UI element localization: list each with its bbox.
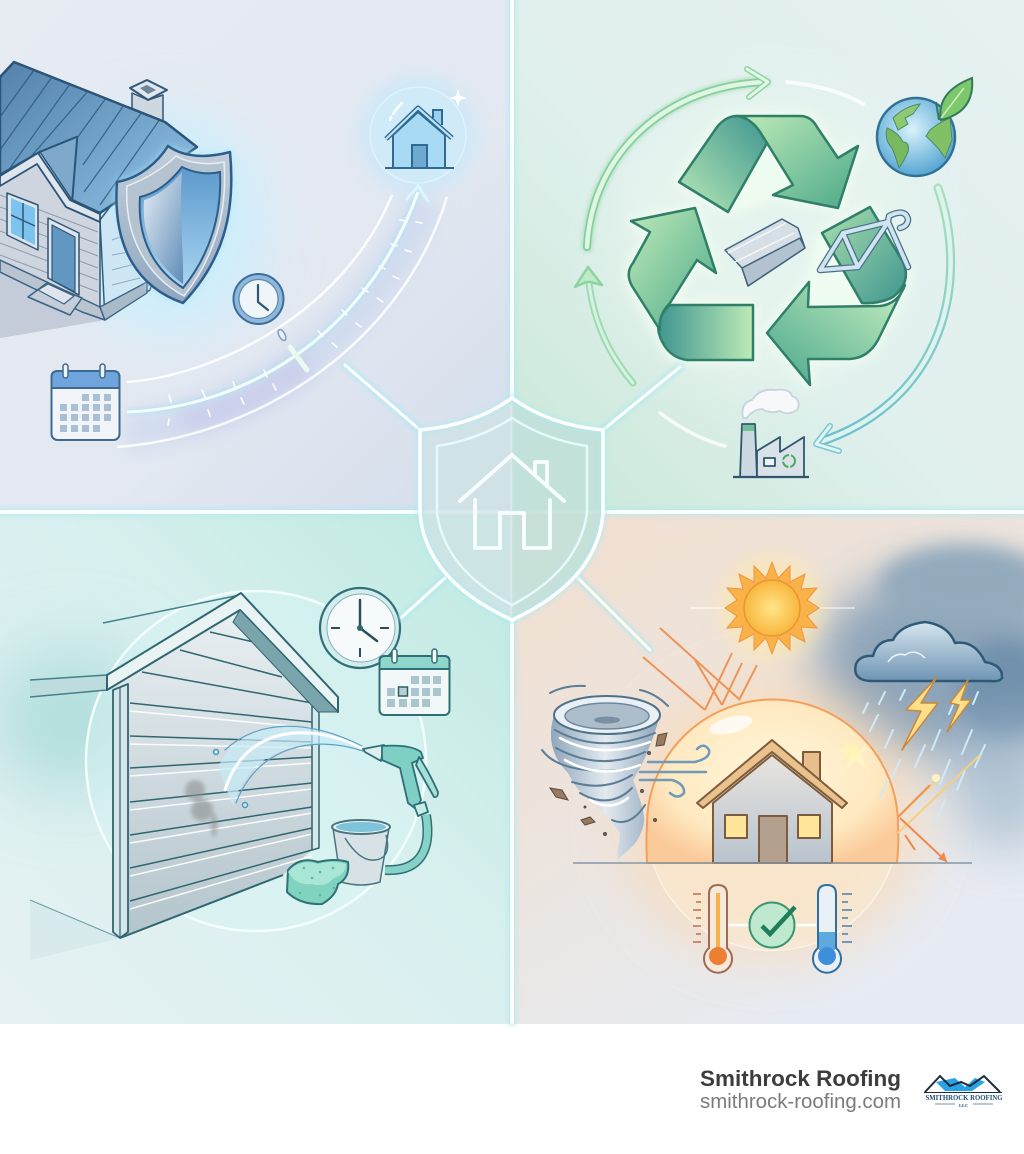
dirt stain: [185, 780, 217, 837]
icon: calendar: [380, 649, 450, 715]
brand footer: [700, 1066, 1003, 1113]
icon: hose and nozzle: [363, 745, 438, 870]
deflected sun rays: [643, 628, 757, 710]
timeline arc ribbon: [117, 186, 447, 447]
icon: bucket: [332, 820, 390, 885]
water spray: [214, 726, 363, 808]
glow ring: [86, 591, 426, 931]
icon: check circle: [750, 902, 795, 948]
icon: protective shield: [116, 146, 231, 303]
thermometers and check: [693, 885, 852, 973]
icon: hot thermometer: [693, 885, 732, 973]
storm clouds: [815, 545, 1024, 850]
icon: house outline: [460, 455, 564, 548]
panel: maintenance: [0, 512, 512, 1024]
recycling symbol: [629, 116, 908, 385]
icon: cold thermometer: [813, 885, 852, 973]
house: [697, 740, 847, 863]
wind lines: [640, 746, 709, 796]
chimney: [130, 80, 167, 122]
icon: clock: [234, 274, 284, 324]
central shield emblem: [420, 398, 603, 620]
icon: clock: [320, 588, 400, 668]
icon: storm cloud: [855, 622, 1002, 681]
rain: [863, 690, 985, 824]
icon: calendar: [52, 364, 120, 440]
icon: earth with leaf: [877, 78, 972, 176]
icon: house in bubble: [370, 87, 467, 183]
logo: SMITHROCK ROOFING: [926, 1093, 1003, 1102]
icon: sponge: [287, 860, 348, 904]
panel: recycling: [512, 0, 1024, 512]
house with metal roof: [0, 62, 197, 338]
tornado debris: [550, 733, 667, 836]
logo: [924, 1076, 1003, 1108]
ground line: [573, 862, 972, 864]
icon: sun: [690, 556, 855, 660]
window: [7, 193, 38, 250]
logo: LLC: [959, 1103, 968, 1108]
door: [48, 218, 79, 295]
icon: bicycle frame: [820, 213, 908, 270]
steps: [28, 283, 82, 315]
website: smithrock-roofing.com: [700, 1091, 901, 1113]
icon: lightning bolts: [902, 677, 971, 750]
protective bubble: [646, 700, 898, 950]
icon: factory: [733, 390, 809, 477]
deflected sparks: [898, 755, 980, 862]
panel: weather resistance: [512, 512, 1024, 1024]
icon: roofing panel: [725, 219, 805, 286]
panel: long-term protection timeline: [0, 0, 512, 512]
company name: Smithrock Roofing: [700, 1066, 901, 1091]
garage with siding: [30, 593, 338, 960]
circular flow arrows: [575, 69, 951, 451]
icon: tornado: [542, 686, 668, 860]
